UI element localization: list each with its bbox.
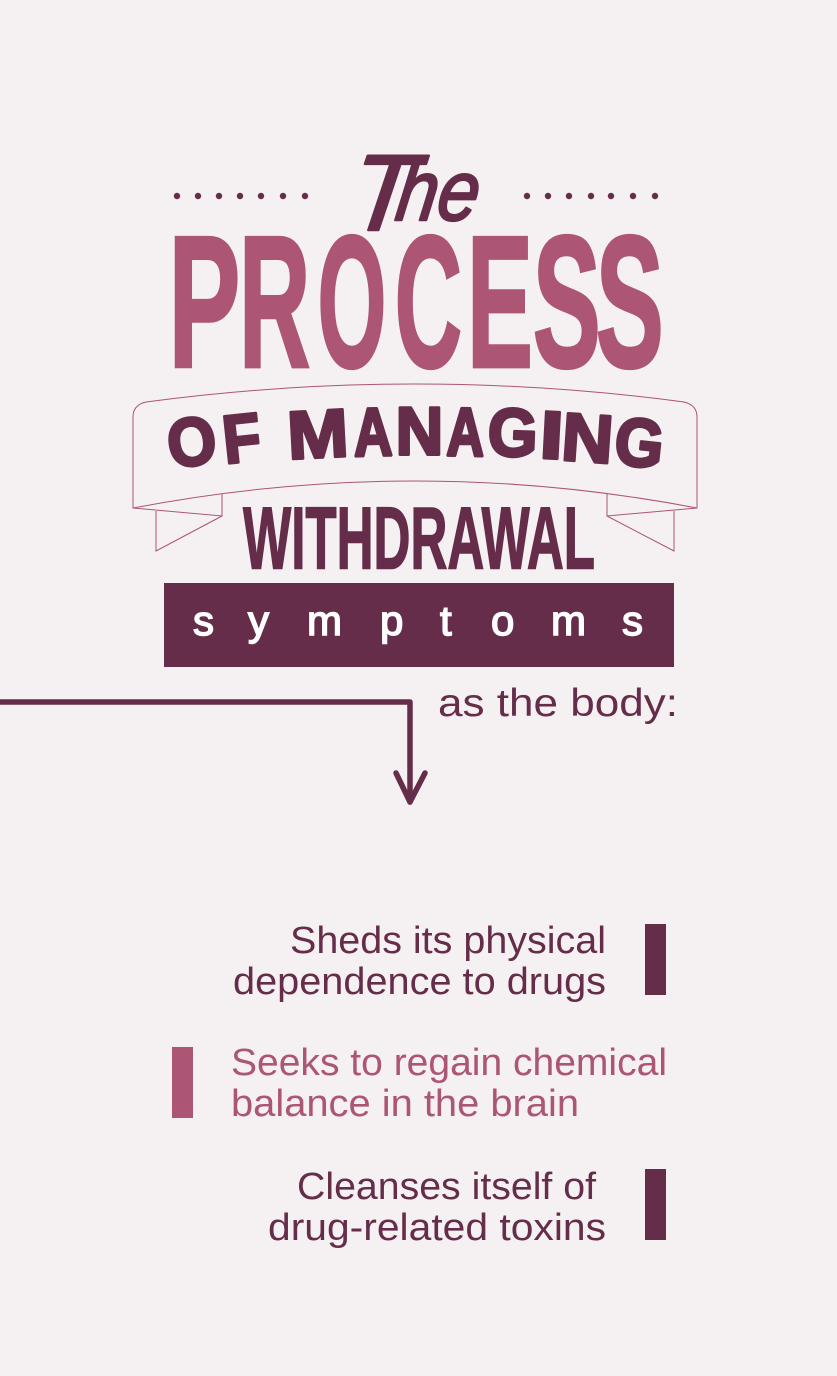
item 3 text <box>268 1166 606 1249</box>
title: OF MANAGING: G <box>487 393 539 471</box>
ribbon banner <box>133 384 697 551</box>
symptoms banner: symptoms <box>193 597 643 644</box>
item 1 text: dependence to drugs <box>233 961 606 1003</box>
item 2 bar <box>172 1047 193 1118</box>
title: PROCESS: C <box>395 198 462 407</box>
title: OF MANAGING: N <box>559 398 616 478</box>
title: PROCESS: S <box>533 198 601 408</box>
title: OF MANAGING: O <box>162 401 221 483</box>
title: PROCESS: O <box>318 198 386 408</box>
arrow <box>0 702 425 802</box>
item 1 bar <box>645 924 666 995</box>
title: PROCESS: R <box>239 196 310 407</box>
item 3 text: drug-related toxins <box>268 1207 606 1249</box>
symptoms banner <box>164 583 674 667</box>
title: The: T <box>343 132 432 253</box>
decorative dots left <box>174 193 308 199</box>
item 2 text: balance in the brain <box>231 1083 579 1125</box>
title: The <box>343 132 487 253</box>
title: OF MANAGING: M <box>285 394 350 473</box>
title: PROCESS: E <box>467 197 533 407</box>
title: OF MANAGING: A <box>353 394 393 470</box>
item 2 text: Seeks to regain chemical <box>231 1042 667 1084</box>
title: OF MANAGING: N <box>396 394 443 470</box>
item 1 text: Sheds its physical <box>290 920 606 962</box>
item 1 text <box>233 920 606 1003</box>
title: OF MANAGING: F <box>219 398 264 478</box>
title: OF MANAGING <box>162 393 668 483</box>
title: WITHDRAWAL: WITHDRAWAL <box>243 488 595 588</box>
item 3 text: Cleanses itself of <box>297 1166 596 1208</box>
title: PROCESS: S <box>596 198 664 408</box>
decorative dots right <box>524 193 658 199</box>
title: OF MANAGING: G <box>611 402 668 483</box>
title: The: he <box>391 144 487 239</box>
item 3 bar <box>645 1169 666 1240</box>
text: as the body: as the body: <box>438 682 678 725</box>
title: OF MANAGING: A <box>446 393 485 470</box>
title: OF MANAGING: I <box>537 397 566 474</box>
title: PROCESS <box>168 196 664 408</box>
title: PROCESS: P <box>168 197 240 407</box>
item 2 text <box>231 1042 667 1125</box>
